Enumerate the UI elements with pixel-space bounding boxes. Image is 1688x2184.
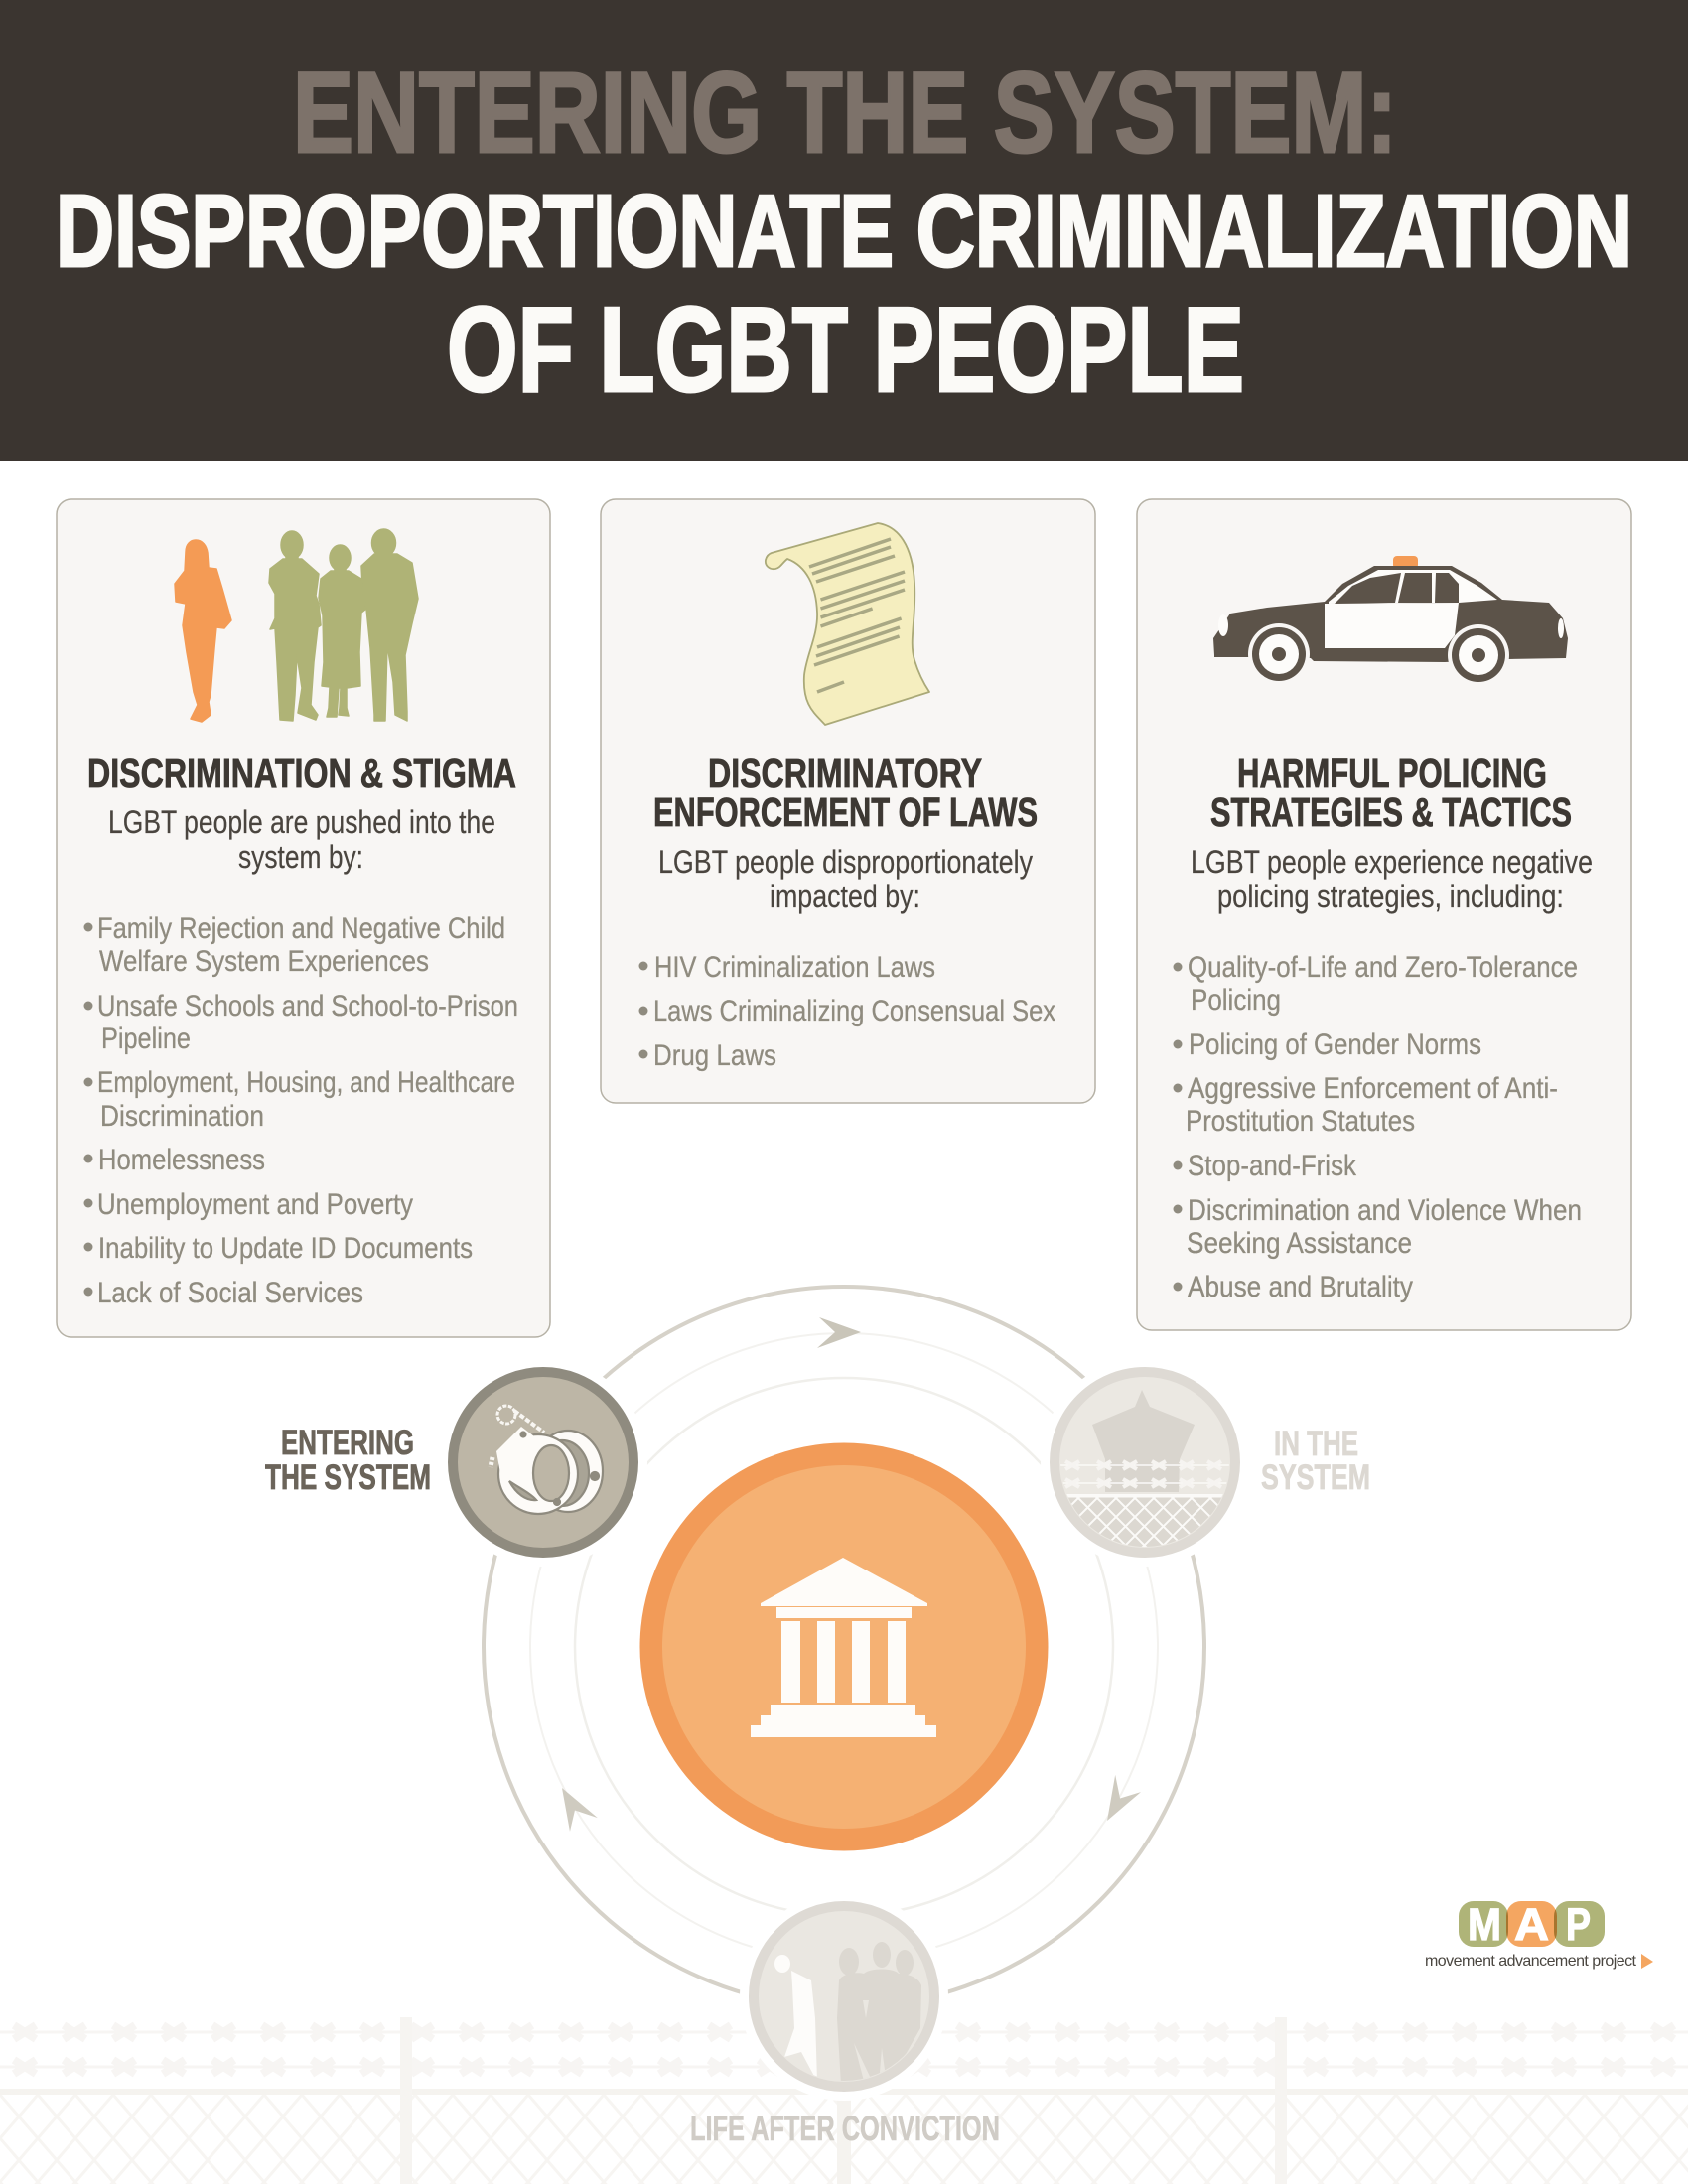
logo arrow (1641, 1954, 1653, 1969)
intro text: LGBT people disproportionately (658, 844, 1033, 880)
icon: handcuffs (491, 1406, 603, 1514)
bullet list: Discrimination (100, 1100, 264, 1133)
heading: STRATEGIES & TACTICS (1210, 789, 1572, 835)
title line 3: OF LGBT PEOPLE (447, 282, 1244, 417)
bullet list: Family Rejection and Negative Child (97, 912, 505, 945)
label: entering the system (265, 1424, 431, 1497)
arrow: clockwise top (817, 1317, 861, 1348)
header band (0, 0, 1688, 461)
bullet list: Laws Criminalizing Consensual Sex (653, 995, 1055, 1027)
panel: discriminatory enforcement of laws (601, 499, 1095, 1103)
label: entering the system: THE SYSTEM (265, 1458, 431, 1497)
icon: green group silhouette (269, 529, 418, 721)
bullet list: Policing of Gender Norms (1189, 1028, 1481, 1061)
bullet list: Unemployment and Poverty (97, 1188, 413, 1221)
bullet list (639, 951, 1055, 1072)
icon: orange woman silhouette (175, 540, 231, 722)
heading: DISCRIMINATION & STIGMA (87, 751, 516, 796)
node: life after conviction (740, 1892, 948, 2101)
bullet list: Employment, Housing, and Healthcare (97, 1066, 515, 1099)
logo tagline: movement advancement project (1425, 1953, 1637, 1970)
cycle rings (484, 1287, 1204, 2007)
intro text: system by: (238, 839, 363, 875)
node: in the system (1041, 1358, 1249, 1567)
icon: watchtower and fence (1060, 1390, 1229, 1547)
node: entering the system (439, 1358, 647, 1567)
arrow: clockwise lower right (1093, 1775, 1142, 1828)
icon: people silhouettes (774, 1942, 921, 2085)
bullet list: Welfare System Experiences (99, 945, 429, 978)
bullet list: Homelessness (98, 1144, 265, 1176)
heading: DISCRIMINATORY (708, 751, 982, 796)
bullet list (1174, 951, 1582, 1303)
logo: MAP (1425, 1899, 1653, 1970)
heading (653, 751, 1038, 835)
heading: HARMFUL POLICING (1237, 751, 1547, 796)
label: in the system: SYSTEM (1261, 1458, 1370, 1497)
heading: ENFORCEMENT OF LAWS (653, 789, 1038, 835)
intro text: LGBT people are pushed into the (108, 804, 495, 840)
icon: courthouse (751, 1558, 936, 1737)
intro text (1191, 844, 1593, 914)
logo: MAP: M (1468, 1899, 1501, 1950)
bullet list: HIV Criminalization Laws (654, 951, 935, 984)
title line 1: ENTERING THE SYSTEM: (293, 50, 1397, 177)
bullet list: Drug Laws (653, 1039, 776, 1072)
intro text: impacted by: (770, 879, 920, 914)
label: entering the system: ENTERING (281, 1424, 414, 1462)
logo: MAP: P (1566, 1899, 1591, 1950)
intro text: LGBT people experience negative (1191, 844, 1593, 880)
bullet list: Seeking Assistance (1187, 1227, 1412, 1260)
arrow: clockwise lower left (549, 1780, 598, 1834)
label: in the system (1261, 1425, 1370, 1497)
bullet list: Inability to Update ID Documents (98, 1232, 473, 1265)
bullet list: Quality-of-Life and Zero-Tolerance (1188, 951, 1578, 984)
heading (1210, 751, 1572, 835)
bullet list: Stop-and-Frisk (1188, 1150, 1357, 1182)
icon: legal scroll (766, 523, 929, 725)
bullet list: Discrimination and Violence When (1188, 1194, 1582, 1227)
background prison fence (0, 2017, 1688, 2184)
logo: MAP: A (1514, 1899, 1549, 1950)
bullet list: Pipeline (101, 1023, 191, 1055)
panel: harmful policing strategies (1137, 499, 1631, 1330)
label: in the system: IN THE (1274, 1425, 1358, 1463)
bullet list: Aggressive Enforcement of Anti- (1188, 1072, 1558, 1105)
bullet list: Policing (1191, 984, 1281, 1017)
center courthouse circle (639, 1443, 1049, 1850)
intro text (658, 844, 1033, 914)
bullet list: Unsafe Schools and School-to-Prison (97, 990, 518, 1023)
panel: discrimination and stigma (57, 499, 550, 1337)
bullet list: Prostitution Statutes (1186, 1105, 1415, 1138)
label: life after conviction: LIFE AFTER CONVICTION (690, 2110, 1000, 2148)
icon: police car (1213, 556, 1568, 686)
bullet list: Abuse and Brutality (1188, 1271, 1413, 1303)
bullet list: Lack of Social Services (97, 1277, 363, 1309)
intro text (108, 804, 495, 875)
intro text: policing strategies, including: (1217, 879, 1564, 914)
bullet list (83, 912, 518, 1309)
